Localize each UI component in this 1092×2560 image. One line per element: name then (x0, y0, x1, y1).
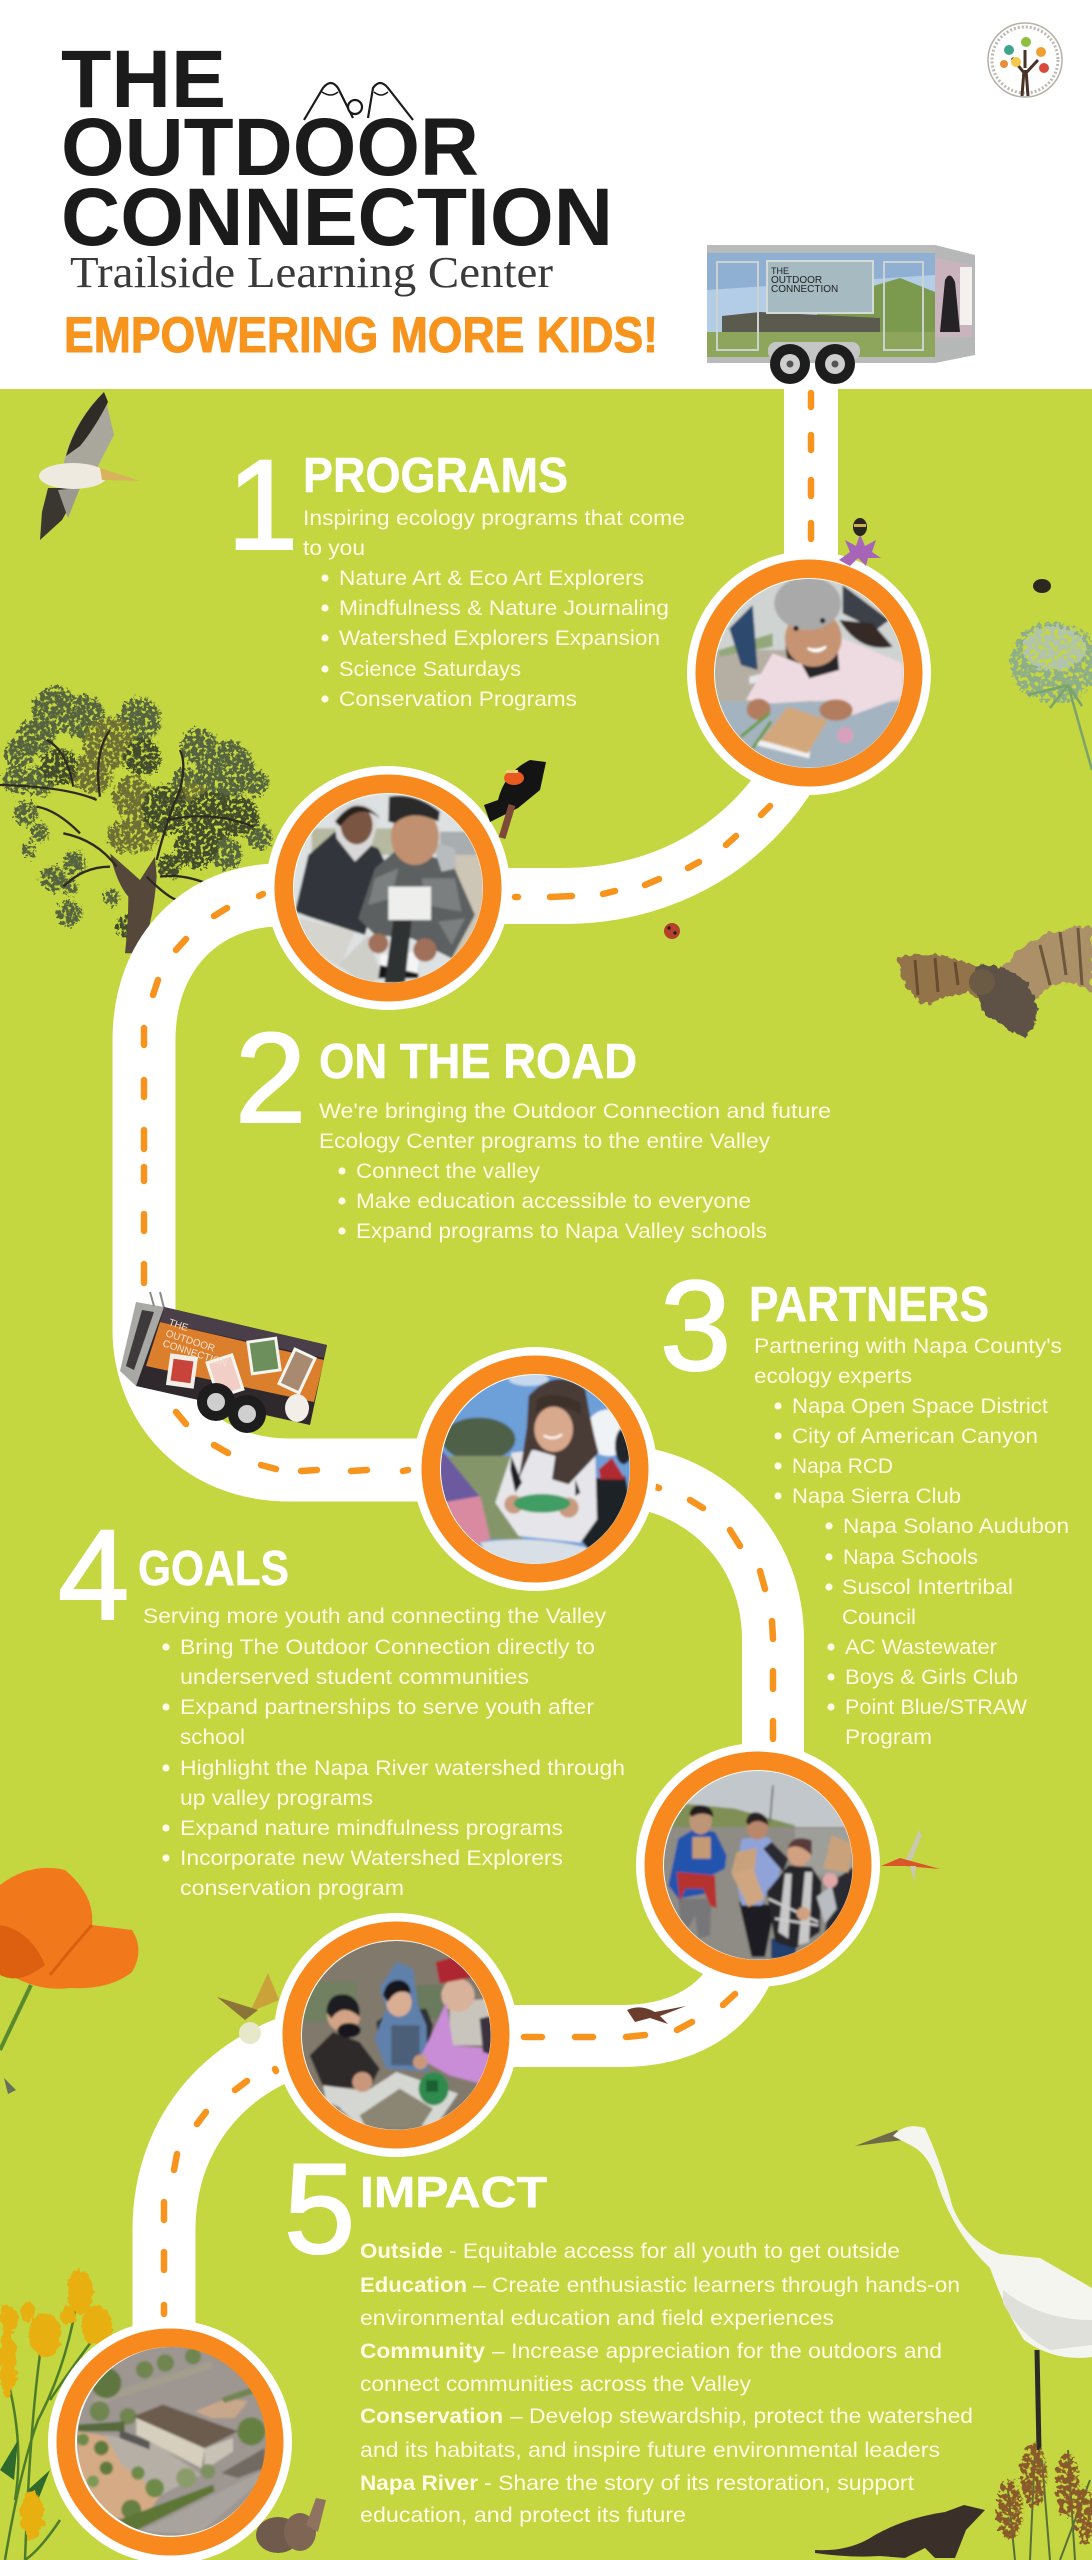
trailer: road trailer with sunset wrap: OUTDOOR (164, 1328, 216, 1355)
icon: oak tree (0, 687, 273, 953)
bullet list: partners: Suscol Intertribal (842, 1576, 1013, 1599)
bullet list: partners: Napa Schools (843, 1546, 978, 1569)
bullet list: road goals: Connect the valley (356, 1160, 541, 1183)
photo circle 2: two boys with microscope (266, 766, 510, 1010)
section 5: impact (284, 2138, 973, 2527)
heading: partners: PARTNERS (749, 1278, 989, 1332)
trailer: header trailer with wheels: THE (771, 266, 789, 276)
intro text (319, 1100, 831, 1153)
icon: goslings (256, 2498, 326, 2553)
bullet list: road goals: Make education accessible to everyone (356, 1190, 751, 1213)
bullet list: goals (162, 1636, 625, 1900)
intro text: Partnering with Napa County's (754, 1335, 1062, 1358)
icon: foundation logo (988, 23, 1062, 97)
icon: great egret (855, 2126, 1092, 2450)
icon: red-winged blackbird (484, 760, 546, 838)
bullet list: partners: Program (845, 1726, 932, 1749)
bullet list: goals: Expand partnerships to serve youth after (180, 1696, 594, 1719)
bullet list: programs: Science Saturdays (339, 658, 521, 681)
bullet list: partners: Point Blue/STRAW (845, 1696, 1027, 1719)
bullet list: partners: Napa Solano Audubon (843, 1515, 1069, 1538)
heading: programs: PROGRAMS (303, 449, 568, 503)
bullet list: partners: Napa RCD (792, 1455, 893, 1478)
intro text: We're bringing the Outdoor Connection and future (319, 1100, 831, 1123)
bullet list: partners (774, 1395, 1069, 1749)
trailer: road trailer with sunset wrap (120, 1292, 327, 1433)
photo circle 6: ecology center aerial rendering (48, 2320, 292, 2560)
road: winding trail (144, 360, 811, 2442)
number 3: 3 (660, 1255, 731, 1398)
intro text (754, 1335, 1062, 1388)
trailer: header trailer with wheels: OUTDOOR (771, 275, 822, 286)
bullet list: programs (321, 567, 669, 711)
icon: salamander (627, 2006, 686, 2024)
icon: river otter (815, 2505, 985, 2558)
trailer: road trailer with sunset wrap: THE (167, 1317, 190, 1334)
heading: on the road: ON THE ROAD (319, 1035, 637, 1089)
impact list: Education (360, 2274, 467, 2297)
icon: bumblebee (1033, 579, 1051, 593)
bullet list: road goals: Expand programs to Napa Valley schools (356, 1220, 767, 1243)
intro text: Ecology Center programs to the entire Valley (319, 1130, 771, 1153)
bullet list: road goals (338, 1160, 767, 1243)
impact list: education, and protect its future (360, 2504, 686, 2527)
icon: binoculars (304, 83, 413, 156)
bullet list: goals: Expand nature mindfulness programs (180, 1817, 563, 1840)
bullet list: partners: Council (842, 1606, 916, 1629)
bullet list: programs: Nature Art & Eco Art Explorers (339, 567, 644, 590)
number 2: 2 (235, 1007, 306, 1150)
impact list: – Create enthusiastic learners through hands-on (473, 2274, 960, 2297)
bullet list: partners: Boys & Girls Club (845, 1666, 1018, 1689)
trailer: road trailer with sunset wrap: CONNECTION (161, 1338, 228, 1370)
impact list: – Develop stewardship, protect the watershed (510, 2405, 973, 2428)
impact list: - Share the story of its restoration, support (484, 2472, 914, 2495)
bullet list: partners: Napa Open Space District (792, 1395, 1048, 1418)
icon: ladybug (664, 923, 680, 939)
trailer: header trailer with wheels: CONNECTION (771, 284, 838, 295)
icon: dragonfly (881, 1830, 940, 1882)
icon: california poppy (0, 1868, 138, 2050)
icon: great horned owl (898, 926, 1092, 1038)
impact list: Conservation (360, 2405, 503, 2428)
title: The Outdoor Connection: THE (61, 34, 226, 125)
section 4: goals (58, 1504, 625, 1900)
impact list: – Increase appreciation for the outdoors and (492, 2340, 942, 2363)
impact list: environmental education and field experiences (360, 2307, 834, 2330)
number 4: 4 (58, 1504, 129, 1647)
icon: thistle with bee (839, 518, 881, 566)
section 2: on the road (235, 1007, 831, 1243)
trailer: header trailer with wheels (707, 245, 975, 384)
icon: mustard flowers (0, 2270, 112, 2560)
impact list (360, 2240, 973, 2527)
impact list: Outside (360, 2240, 443, 2263)
bullet list: programs: Mindfulness & Nature Journaling (339, 597, 669, 620)
bullet list: goals: Highlight the Napa River watershed through (180, 1757, 625, 1780)
title: The Outdoor Connection: OUTDOOR (61, 102, 479, 193)
bullet list: goals: up valley programs (180, 1787, 373, 1810)
icon: swallowtail butterfly and white flower (4, 1973, 279, 2094)
title: The Outdoor Connection: CONNECTION (61, 172, 613, 263)
bullet list: goals: Incorporate new Watershed Explorers (180, 1847, 563, 1870)
intro text: to you (303, 537, 365, 560)
impact list: connect communities across the Valley (360, 2373, 752, 2396)
impact list: Napa River (360, 2472, 478, 2495)
bullet list: goals: underserved student communities (180, 1666, 529, 1689)
section 3: partners (660, 1255, 1069, 1749)
heading: goals: GOALS (138, 1542, 289, 1596)
tagline: Empowering More Kids: EMPOWERING MORE KIDS! (64, 307, 658, 363)
bullet list: goals: Bring The Outdoor Connection directly to (180, 1636, 595, 1659)
subtitle: Trailside Learning Center: Trailside Learning Center (70, 248, 553, 297)
photo circle 1: smiling girl with notebook (687, 551, 931, 795)
photo circle 5: students exploring water tub (274, 1913, 518, 2157)
bullet list: partners: City of American Canyon (792, 1425, 1038, 1448)
section 1: programs (227, 434, 685, 711)
impact list: and its habitats, and inspire future environmental leaders (360, 2439, 940, 2462)
photo circle 4: students with paper bag journals (636, 1743, 880, 1987)
number 5: 5 (284, 2138, 355, 2281)
intro text: Serving more youth and connecting the Valley (143, 1605, 607, 1628)
bullet list: programs: Watershed Explorers Expansion (339, 627, 660, 650)
bullet list: goals: conservation program (180, 1877, 404, 1900)
intro text (303, 507, 685, 560)
heading: impact: IMPACT (360, 2168, 547, 2217)
impact list: Community (360, 2340, 485, 2363)
icon: queen anne's lace (1010, 622, 1092, 770)
intro text: Inspiring ecology programs that come (303, 507, 685, 530)
bullet list: programs: Conservation Programs (339, 688, 577, 711)
bullet list: partners: AC Wastewater (845, 1636, 997, 1659)
number 1: 1 (227, 434, 298, 577)
icon: pelican (39, 392, 140, 540)
bullet list: partners: Napa Sierra Club (792, 1485, 961, 1508)
title: The Outdoor Connection (61, 34, 613, 263)
road center dashes (144, 393, 811, 2314)
bullet list: goals: school (180, 1726, 245, 1749)
photo circle 3: girl holding green bowl (413, 1347, 657, 1591)
icon: reeds (997, 2443, 1092, 2560)
intro text: ecology experts (754, 1365, 912, 1388)
impact list: - Equitable access for all youth to get outside (449, 2240, 900, 2263)
